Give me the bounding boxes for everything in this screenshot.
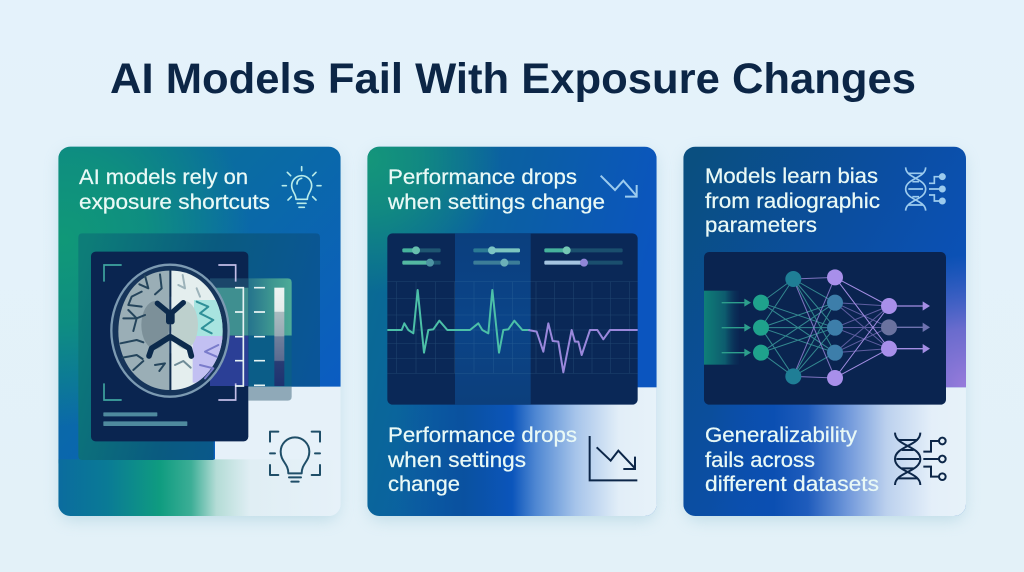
overlay exposure panel <box>248 278 292 401</box>
icon: light bulb with rays <box>282 167 321 207</box>
icon: falling chart <box>590 436 637 480</box>
card heading <box>79 166 270 214</box>
monitor panel <box>387 233 638 405</box>
thalamus <box>141 301 198 349</box>
network connections: purple <box>793 277 889 378</box>
sulci <box>121 274 218 378</box>
network connections: teal <box>761 279 835 376</box>
dark scan panel <box>91 252 248 441</box>
middle setting band <box>455 233 531 405</box>
input data block <box>704 291 739 365</box>
card heading: AI models rely on <box>79 166 248 189</box>
ventricles <box>149 303 191 356</box>
panel: performance drops card <box>367 147 657 520</box>
card heading: Performance drops <box>388 166 577 189</box>
card caption: Performance drops <box>388 424 577 447</box>
icon: dark dna with circuit <box>895 433 946 485</box>
card heading: parameters <box>705 214 817 237</box>
scan corner brackets <box>104 265 236 400</box>
scan backing panel <box>78 233 320 460</box>
exposure grayscale bar <box>274 288 284 386</box>
card caption <box>387 424 577 496</box>
card heading: when settings change <box>387 191 605 214</box>
output arrows <box>889 301 930 353</box>
scale ticks <box>235 288 265 386</box>
sliders: setting three <box>544 246 623 267</box>
panel: model bias card <box>683 147 966 520</box>
card caption: different datasets <box>705 473 879 496</box>
icon: dna with circuit <box>906 167 945 211</box>
sliders: setting two <box>473 246 520 267</box>
sliders: setting one <box>402 246 441 267</box>
midline <box>168 271 173 390</box>
input arrows <box>722 299 751 357</box>
network panel <box>704 252 946 405</box>
report lines <box>103 412 187 426</box>
card heading: Models learn bias <box>705 165 878 188</box>
network nodes <box>753 269 897 386</box>
ecg trace: stable <box>387 290 530 353</box>
card heading <box>705 165 880 237</box>
card heading <box>387 166 605 214</box>
card heading: exposure shortcuts <box>79 191 270 214</box>
icon: downward trend <box>601 176 637 197</box>
overlay on scan panel <box>210 278 248 386</box>
card caption: fails across <box>705 449 815 472</box>
icon: focused light bulb <box>270 432 320 482</box>
icon: brain scan <box>111 265 229 397</box>
card heading: from radiographic <box>705 190 880 213</box>
card caption: change <box>388 473 460 496</box>
monitor grid <box>387 282 638 373</box>
title: AI Models Fail With Exposure Changes <box>110 55 916 103</box>
card caption: Generalizability <box>705 424 858 447</box>
ecg trace: degraded <box>528 323 638 372</box>
card caption: when settings <box>387 449 526 472</box>
panel: exposure shortcuts card <box>58 147 341 520</box>
card caption <box>705 424 879 496</box>
